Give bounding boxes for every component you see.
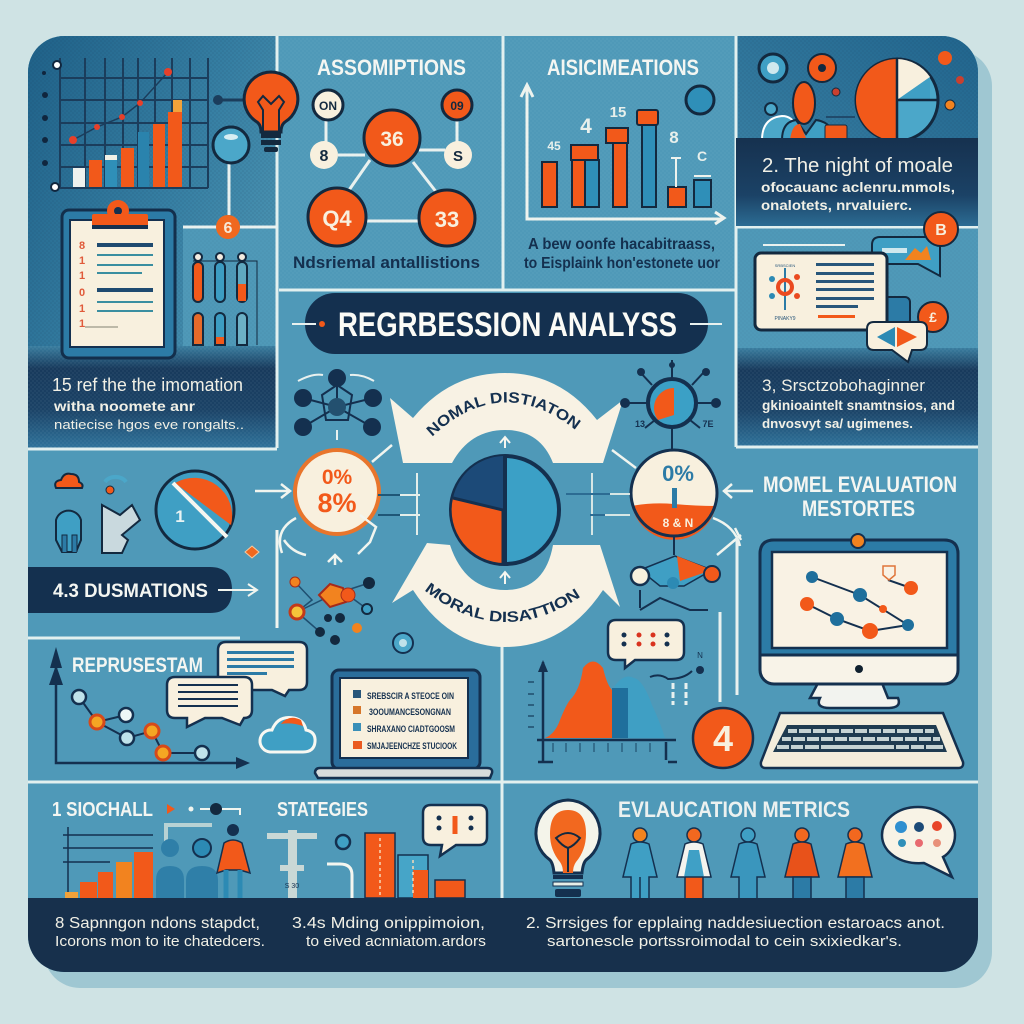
callout: left percentage circle: 0% [322, 466, 352, 489]
chart: screen nodes [800, 566, 918, 639]
text: strategies: to eived acnniatom.ardors [306, 933, 486, 950]
speech bubble: front [167, 677, 252, 727]
chart: three bars [365, 833, 465, 898]
panel: left middle [28, 471, 290, 613]
chart: area curve [528, 660, 677, 762]
text: section 3 [762, 376, 955, 431]
band: section 2 text: 2. The night of moale [762, 155, 953, 177]
callout: left percentage circle: 8% [317, 488, 357, 518]
dividers [28, 36, 978, 900]
heading: assumptions: ASSOMIPTIONS [317, 55, 466, 80]
text: social: 8 Sapnngon ndons stapdct, [55, 915, 260, 932]
icon: slide card: SRBSCIEN [775, 263, 795, 268]
panel backgrounds [28, 36, 978, 448]
chart: bars with axes: 45 [547, 139, 561, 153]
icon: clipboard: 0 [79, 287, 85, 299]
icon: slide card [755, 253, 887, 330]
caption: assimifations: to Eisplaink hon'estonete uor [524, 255, 720, 272]
icon: person and orbit dots [759, 51, 964, 140]
panel: top-left trends [42, 58, 298, 432]
band: bottom text [28, 898, 978, 972]
icon: three people [156, 824, 250, 898]
heading: model evaluation: MOMEL EVALUATION [763, 472, 957, 497]
icon: large light bulb [536, 800, 600, 897]
arrow: normal distribution top arc: NOMAL DISTIATON [426, 392, 581, 436]
icon: ring [336, 835, 350, 849]
text: evaluation: sartonescle portssroimodal to cein sxixiedkar's. [547, 933, 902, 950]
icon: clipboard: 1 [79, 303, 85, 315]
text: strategies: 3.4s Mding onippimoion, [292, 915, 485, 932]
chart: bars with axes: 15 [610, 104, 626, 121]
diagram: connected nodes: Q4 [322, 206, 352, 231]
callout: right percentage circle [566, 450, 741, 555]
chart: bars with axes: 4 [580, 115, 592, 138]
chart: bars with axes: C [697, 148, 707, 164]
chart: small pie [156, 471, 234, 549]
heading: assimifations: AISICIMEATIONS [547, 55, 699, 80]
text: social: Icorons mon to ite chatedcers. [55, 933, 265, 950]
diagram: connected nodes: 09 [450, 99, 464, 113]
icon: clipboard [62, 200, 175, 358]
icon: row of five people [623, 828, 872, 900]
icon: faded post: S 30 [285, 883, 299, 890]
callout: left percentage circle [280, 445, 420, 565]
caption: assumptions: Ndsriemal antallistions [293, 253, 480, 272]
speech bubble: back [218, 642, 307, 696]
heading: strategies: STATEGIES [277, 799, 368, 821]
icon: gauge top right of centre [620, 360, 721, 450]
icon: blue ball with number 6: 6 [224, 220, 233, 237]
text: social [55, 915, 265, 950]
label pill: dusmations [28, 567, 257, 613]
icon: small connector: N [697, 651, 703, 660]
text: section 3: gkinioaintelt snamtnsios, and [762, 397, 955, 413]
diagram: connected nodes: S [453, 148, 463, 165]
heading: evaluation metrics: EVLAUCATION METRICS [618, 797, 850, 822]
diagram: connected nodes: 36 [380, 128, 404, 151]
icon: laptop: SHRAXANO CIADTGOOSM [367, 724, 455, 734]
network icon top-left of centre [294, 369, 382, 440]
arrow: normal distribution top arc [390, 373, 621, 463]
title banner: REGRBESSION ANALYSS [338, 306, 677, 344]
icon: faded post [267, 830, 317, 898]
text: intro: witha noomete anr [53, 398, 196, 414]
heading: model evaluation [724, 472, 957, 521]
heading: model evaluation: MESTORTES [802, 496, 915, 521]
heading: reprusestam: REPRUSESTAM [72, 654, 203, 677]
diagram: connected nodes [308, 90, 475, 246]
icon: node bridge [631, 537, 720, 610]
chart: bars with axes [521, 85, 724, 224]
panel: assimifations bar chart [521, 55, 724, 272]
chart: small pie: 1 [175, 507, 185, 526]
icon: clipboard: 8 [79, 240, 85, 252]
panel: right middle presentation [755, 212, 958, 431]
label pill: dusmations: 4.3 DUSMATIONS [53, 581, 208, 602]
callout: right percentage circle: 8 & N [663, 516, 693, 530]
icon: orange network [290, 577, 375, 645]
panel: strategies [267, 799, 487, 898]
icon: speech bubble top: B [935, 222, 947, 239]
panel: reprusestam line chart [49, 642, 492, 778]
icon: keyboard [761, 713, 963, 768]
icon: small blue box and orange badge [880, 297, 948, 332]
icon: cloud [260, 718, 315, 752]
icon: slide card: PINAKY9 [774, 316, 796, 322]
arrow: normal distribution bottom arc: MORAL DISATTION [425, 582, 580, 622]
icon: speech bubble bottom [867, 322, 927, 362]
band: section 2 text [736, 138, 978, 226]
band: section 2 text: ofocauanc aclenru.mmols, [761, 179, 955, 195]
diagram: connected nodes: 8 [320, 148, 329, 165]
icon: gauge top right of centre: 13 [635, 419, 645, 429]
line [327, 864, 352, 898]
panel: bottom left social chart [52, 799, 250, 898]
badge: number 4 [693, 537, 753, 768]
icon: laptop [315, 670, 492, 778]
chart: axes [49, 647, 250, 769]
chart: rising bars [63, 827, 153, 898]
text: strategies [292, 915, 486, 950]
band: section 2 text: onalotets, nrvaluierc. [761, 197, 912, 213]
icons: small people [55, 474, 140, 553]
text: intro [52, 375, 244, 432]
icon: small ring [393, 633, 413, 653]
icon: clipboard: 1 [79, 318, 85, 330]
icon: gauge top right of centre: 7E [702, 419, 714, 429]
heading: social: 1 SIOCHALL [52, 799, 153, 821]
arrow: to left circle [255, 484, 290, 498]
speech bubble: dots [608, 620, 684, 668]
diagram: connected nodes: ON [319, 99, 337, 113]
text: evaluation: 2. Srrsiges for epplaing naddesiuection estaroacs anot. [526, 915, 945, 932]
icon: pie chart [856, 59, 938, 141]
chart: grid with bars [42, 58, 208, 191]
icon: test tubes [193, 253, 257, 345]
text: evaluation [526, 915, 945, 950]
icon: small connector [650, 651, 704, 705]
icon: small connector [167, 803, 240, 815]
icon: laptop: 3OOUMANCESONGNAN [369, 707, 451, 717]
text: intro: 15 ref the the imomation [52, 375, 243, 395]
chart: central pie [451, 437, 559, 584]
chart: node line [72, 690, 209, 760]
panel: top-right people and pie [736, 51, 978, 226]
icon: desktop computer [760, 534, 958, 708]
speech bubble: colored dots [882, 807, 955, 877]
panel: assumptions [293, 55, 480, 272]
caption: assimifations [524, 236, 720, 272]
chart: bars with axes: 8 [669, 128, 679, 147]
text: section 3: dnvosvyt sa/ ugimenes. [762, 416, 913, 431]
panel: distribution chart [528, 537, 753, 768]
icon: speech bubble top [872, 212, 958, 276]
text: section 3: 3, Srsctzobohaginner [762, 376, 925, 395]
badge: number 4: 4 [713, 718, 733, 759]
icon: light bulb [213, 72, 298, 152]
text: intro: natiecise hgos eve rongalts.. [54, 417, 244, 432]
arrow: normal distribution bottom arc [392, 543, 620, 647]
caption: assimifations: A bew oonfe hacabitraass, [528, 236, 715, 253]
icon: small blue box and orange badge: £ [929, 309, 937, 325]
title banner [292, 293, 722, 354]
callout: right percentage circle: 0% [662, 461, 694, 486]
icon: small diamond [245, 546, 259, 558]
icon: laptop: SMJAJEENCHZE STUCIOOK [367, 741, 457, 751]
icon: laptop: SREBSCIR A STEOCE OIN [367, 691, 454, 701]
speech bubble: strategies [423, 805, 487, 856]
icon: blue ball with number 6 [183, 127, 277, 239]
diagram: connected nodes: 33 [435, 207, 459, 232]
line [276, 530, 278, 628]
icon: clipboard: 1 [79, 255, 85, 267]
icon: clipboard: 1 [79, 270, 85, 282]
